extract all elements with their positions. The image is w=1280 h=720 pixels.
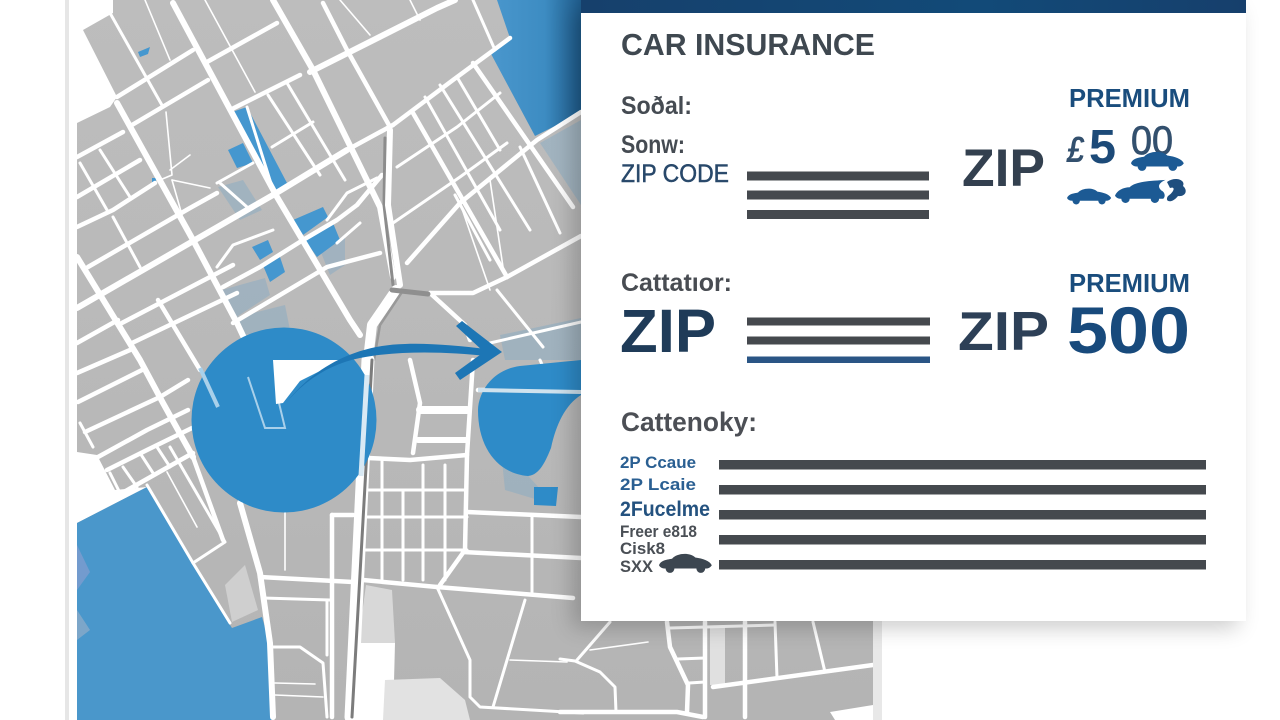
section 1 labels: ZIP CODE: [621, 160, 729, 188]
white areas outside the land: [77, 0, 873, 720]
faded blue zones: [218, 120, 581, 505]
insurance card panel: [581, 0, 1246, 621]
section 2 bars: [747, 318, 930, 363]
section 3 row labels: Freer e818: [620, 522, 697, 541]
right-side second blue circle: [478, 360, 581, 476]
section 2 ZIP large: ZIP: [620, 297, 716, 365]
map panel: [65, 0, 882, 720]
premium value 1: 5: [1089, 121, 1116, 174]
section 3 label: Cattenoky:: [621, 407, 757, 437]
premium label 1: PREMIUM: [1069, 83, 1190, 113]
blue water: bottom left: [77, 487, 273, 720]
section 3 row labels: 2Fucelme: [620, 498, 710, 521]
section 1 labels: Sonw:: [621, 131, 685, 159]
left blue circle: [192, 328, 376, 512]
section 3 row labels: 2P Lcaie: [620, 475, 696, 494]
blue water: top right: [490, 0, 581, 136]
section 3 row labels: 2P Ccaue: [620, 453, 696, 472]
section 1 bars: [747, 172, 929, 219]
section 1 labels: Soðal:: [621, 92, 692, 120]
circle lines: [200, 368, 367, 476]
card shadow: [572, 10, 1238, 628]
premium value 1: [1066, 119, 1173, 174]
section 1 labels: [621, 92, 729, 188]
premium value 1: £: [1066, 129, 1085, 170]
title: CAR INSURANCE: [621, 27, 875, 62]
section 3 row labels: SXX: [620, 557, 654, 576]
section 3 row labels: [620, 453, 710, 576]
premium label 2: PREMIUM: [1069, 268, 1190, 298]
map land base: [77, 0, 873, 720]
section 2 label: Cattatıor:: [621, 269, 732, 297]
section 1 ZIP: ZIP: [962, 139, 1045, 198]
white wedge in circle: [273, 360, 342, 404]
central highway: [351, 130, 428, 717]
arrow: [286, 321, 502, 403]
blue blocks: [138, 47, 558, 506]
premium value 1: 00: [1131, 119, 1173, 163]
section 3 row labels: Cisk8: [620, 539, 665, 558]
icons: cars: [1067, 152, 1186, 204]
road network: [77, 0, 873, 717]
section 3 bars: [719, 460, 1206, 570]
light patches: [225, 565, 725, 720]
icon: dark car: [659, 554, 712, 573]
premium value 2: 500: [1067, 293, 1190, 367]
section 2 ZIP: ZIP: [958, 300, 1049, 362]
card header bar: [581, 0, 1246, 13]
